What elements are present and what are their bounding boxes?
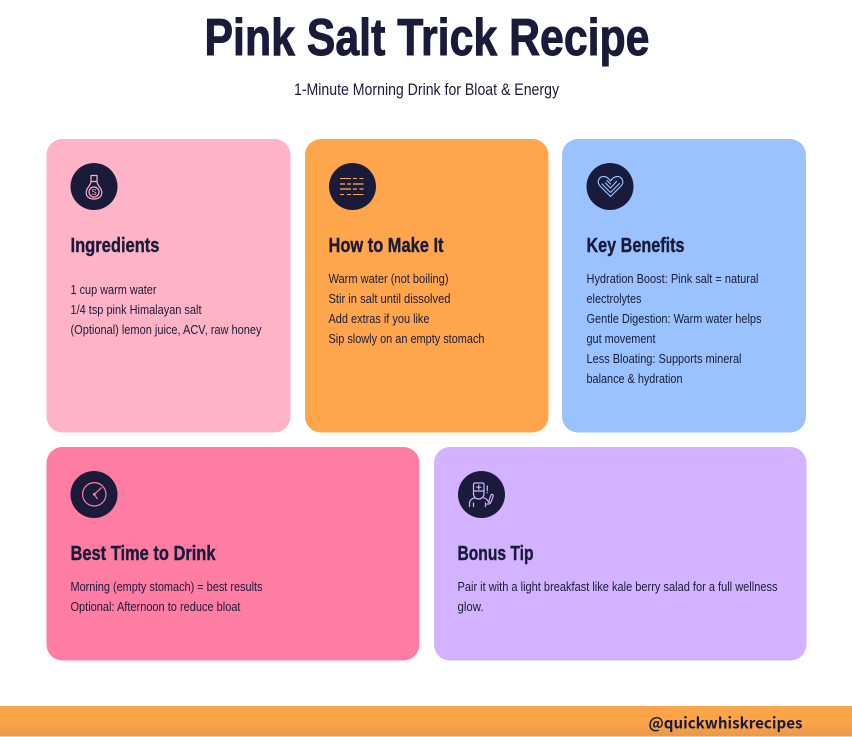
steps list: Sip slowly on an empty stomach (328, 332, 485, 346)
benefits list: Gentle Digestion: Warm water helps (586, 312, 762, 326)
icon: steps list (329, 163, 376, 210)
steps list: Warm water (not boiling) (328, 272, 448, 286)
panel: key benefits (562, 139, 806, 432)
footer bar (0, 706, 852, 736)
panel: bonus tip (434, 447, 806, 660)
timing notes: Optional: Afternoon to reduce bloat (70, 600, 241, 614)
steps list: Stir in salt until dissolved (328, 292, 451, 306)
benefits list: gut movement (586, 332, 656, 346)
heading: best time to drink: Best Time to Drink (70, 542, 216, 565)
icon: layered heart (586, 163, 634, 210)
benefits list (586, 272, 762, 386)
tip text (458, 580, 778, 614)
benefits list: electrolytes (586, 292, 642, 306)
benefits list: Hydration Boost: Pink salt = natural (586, 272, 758, 286)
heading: key benefits: Key Benefits (586, 234, 684, 257)
ingredients list (70, 283, 262, 337)
icon: clock (70, 471, 118, 518)
title: Pink Salt Trick Recipe (204, 9, 650, 67)
benefits list: Less Bloating: Supports mineral (586, 352, 742, 366)
icon: salt shaker: S (91, 188, 97, 197)
heading: how to make it: How to Make It (328, 234, 444, 257)
panel: how to make it (305, 139, 548, 432)
steps list: Add extras if you like (328, 312, 430, 326)
footer handle: @quickwhiskrecipes (648, 712, 803, 734)
ingredients list: 1/4 tsp pink Himalayan salt (70, 303, 202, 317)
steps list (328, 272, 485, 346)
ingredients list: 1 cup warm water (70, 283, 156, 297)
panel: ingredients (46, 139, 290, 432)
timing notes (70, 580, 262, 614)
ingredients list: (Optional) lemon juice, ACV, raw honey (70, 323, 262, 337)
heading: ingredients: Ingredients (70, 234, 160, 257)
subtitle: 1-Minute Morning Drink for Bloat & Energy (294, 81, 560, 99)
timing notes: Morning (empty stomach) = best results (70, 580, 262, 594)
icon: doctor with raised hand (458, 471, 505, 518)
heading: bonus tip: Bonus Tip (458, 542, 534, 565)
tip text: Pair it with a light breakfast like kale berry salad for a full wellness (458, 580, 778, 594)
tip text: glow. (458, 600, 484, 614)
icon: salt shaker (70, 163, 118, 210)
benefits list: balance & hydration (586, 372, 683, 386)
panel: best time to drink (46, 447, 420, 660)
